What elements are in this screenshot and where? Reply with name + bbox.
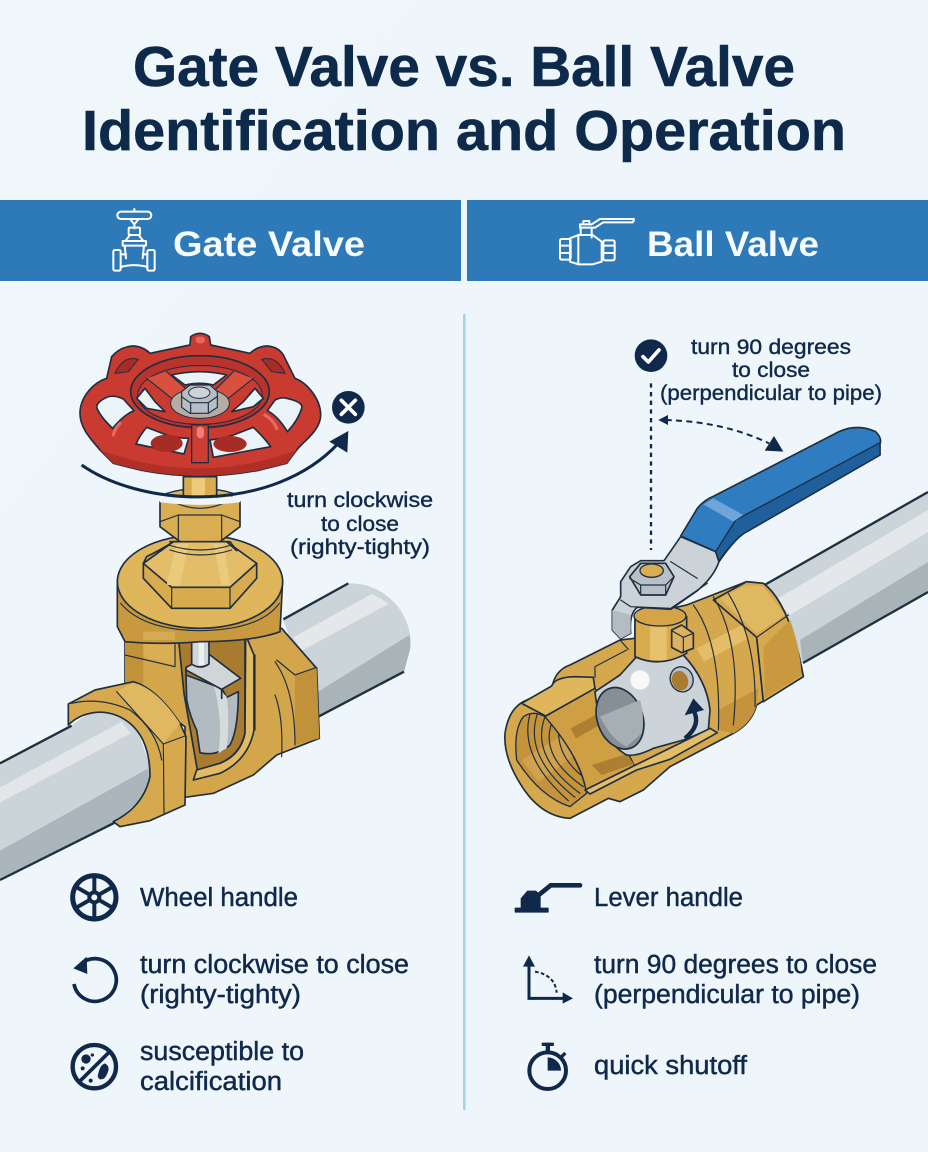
callout: ball valve bbox=[660, 335, 882, 405]
gate valve pipe and body bbox=[0, 535, 411, 880]
icon: lever bbox=[515, 885, 580, 913]
right collars bbox=[697, 625, 748, 662]
column divider bbox=[463, 314, 466, 1110]
panel header: gate valve bbox=[0, 200, 461, 281]
text: turn clockwise: (righty-tighty) bbox=[140, 981, 301, 1009]
text: quick shutoff: quick shutoff bbox=[594, 1052, 748, 1080]
text: turn 90 degrees: turn 90 degrees to close bbox=[594, 951, 877, 979]
text: susceptible to calcification: susceptible to bbox=[140, 1038, 304, 1066]
lower lip bbox=[585, 728, 717, 794]
upper lip bbox=[522, 677, 595, 716]
gate valve stem and nut bbox=[143, 477, 240, 563]
title bbox=[82, 35, 846, 163]
text: wheel handle: Wheel handle bbox=[140, 884, 298, 912]
callout: gate valve bbox=[287, 488, 433, 559]
icon: calcification prohibited bbox=[73, 1045, 116, 1088]
icon: rotate arrow bbox=[73, 957, 116, 1001]
rotation arrow bbox=[82, 431, 348, 501]
body window bbox=[178, 634, 245, 770]
icon: ball valve outline bbox=[560, 219, 634, 264]
stem bbox=[634, 606, 693, 662]
callout: gate valve: turn clockwise bbox=[287, 488, 433, 512]
text: susceptible to calcification: calcification bbox=[140, 1068, 282, 1096]
left pipe bbox=[0, 708, 153, 880]
lower frame bbox=[193, 635, 254, 780]
icon: right angle bbox=[523, 955, 573, 1004]
callout: ball valve: turn 90 degrees bbox=[691, 335, 851, 359]
valve body bbox=[125, 628, 319, 797]
interior cavity bbox=[545, 688, 637, 790]
threaded opening bbox=[516, 713, 597, 807]
heading: gate valve: Gate Valve bbox=[173, 225, 365, 264]
illustration: gate valve bbox=[0, 333, 411, 880]
ball bbox=[588, 655, 710, 756]
bonnet bbox=[117, 535, 283, 643]
text: lever handle: Lever handle bbox=[594, 884, 743, 912]
text: susceptible to calcification bbox=[140, 1038, 304, 1096]
callout: ball valve: to close bbox=[732, 358, 810, 382]
ball valve right pipe bbox=[761, 492, 928, 663]
ball valve body bbox=[505, 582, 803, 818]
gate wedge bbox=[186, 640, 241, 754]
text: turn 90 degrees: (perpendicular to pipe) bbox=[594, 981, 860, 1009]
icon: check badge bbox=[635, 339, 667, 372]
left coupling nut bbox=[68, 682, 186, 827]
red wheel handle bbox=[80, 333, 321, 476]
ball rotation arrow bbox=[685, 698, 704, 738]
callout: gate valve: to close bbox=[321, 512, 399, 536]
callout: ball valve: (perpendicular to pipe) bbox=[660, 381, 882, 405]
blue lever handle bbox=[612, 427, 881, 639]
right pipe bbox=[283, 583, 411, 717]
icon: stopwatch bbox=[529, 1043, 566, 1089]
panel header: ball valve bbox=[467, 200, 928, 281]
text: turn 90 degrees bbox=[594, 951, 877, 1009]
title: Identification and Operation bbox=[82, 99, 846, 163]
icon: close x badge bbox=[332, 391, 365, 424]
feature list: ball valve bbox=[515, 884, 877, 1089]
text: turn clockwise: turn clockwise to close bbox=[140, 951, 409, 979]
icon: gate valve outline bbox=[113, 209, 155, 271]
feature list: gate valve bbox=[73, 876, 409, 1096]
title: Gate Valve vs. Ball Valve bbox=[133, 35, 795, 99]
illustration: ball valve bbox=[505, 339, 928, 818]
90 degree dashed guide bbox=[651, 383, 783, 550]
callout: gate valve: (righty-tighty) bbox=[290, 535, 430, 559]
wheel openings bbox=[97, 372, 302, 457]
icon: wheel bbox=[73, 876, 116, 919]
heading: ball valve: Ball Valve bbox=[647, 225, 819, 264]
text: turn clockwise bbox=[140, 951, 409, 1009]
